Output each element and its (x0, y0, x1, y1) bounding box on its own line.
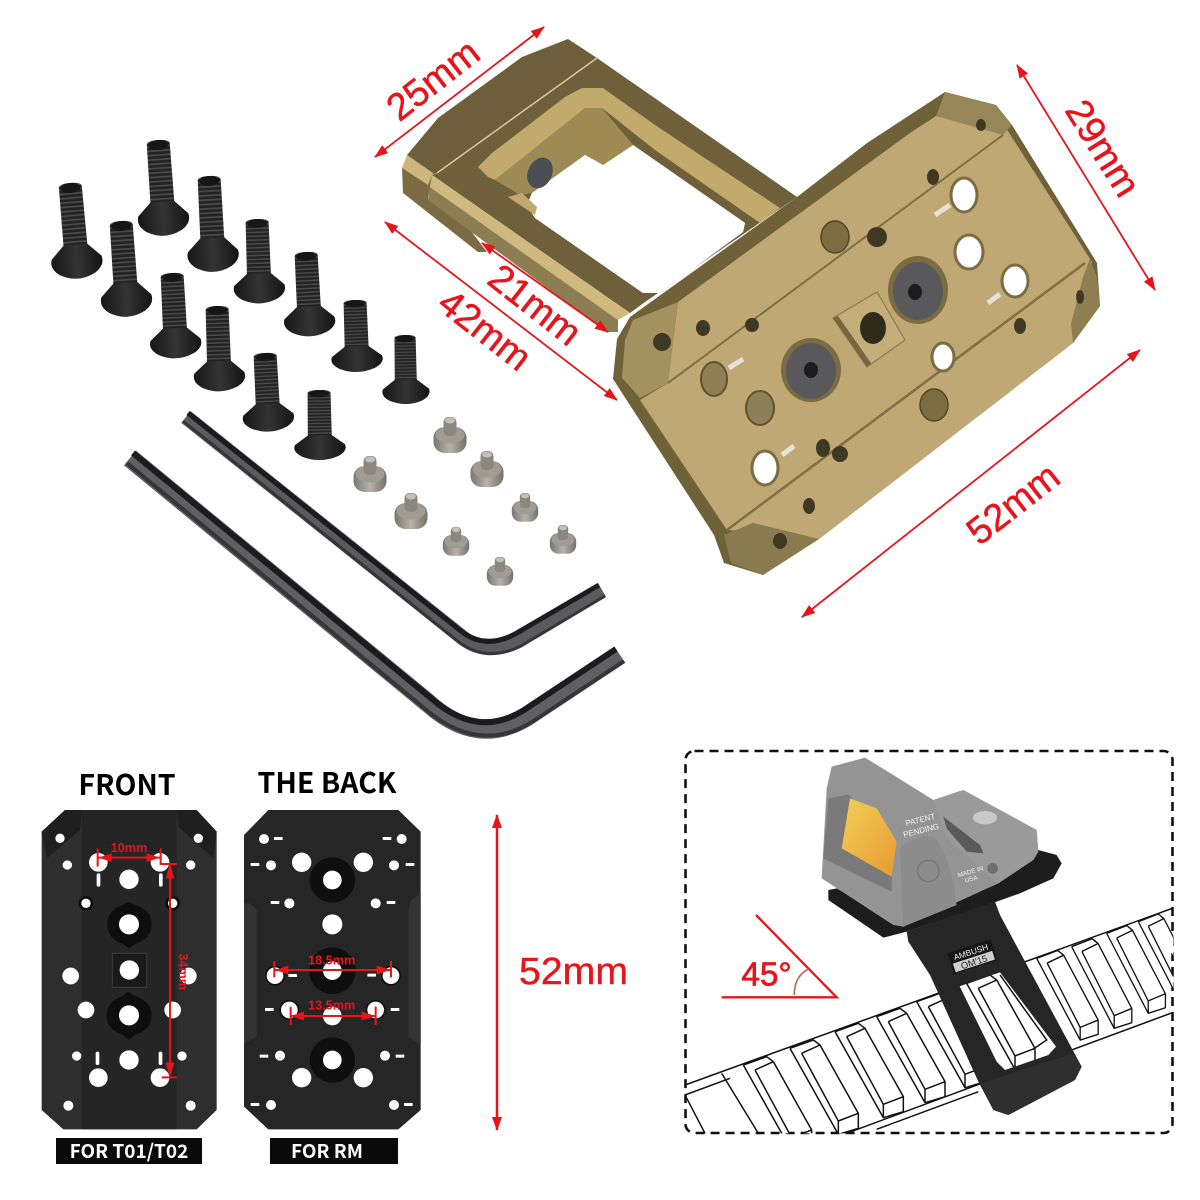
holes: threaded (821, 221, 948, 421)
bracket: long light strip (430, 175, 630, 320)
arm label: AMBUSH OM'15 (947, 939, 997, 974)
arm label: AMBUSH OM'15: AMBUSH (952, 942, 989, 962)
optic text: made in USA: MADE IN (957, 865, 985, 879)
socket screws (781, 256, 948, 402)
bracket: light end strip (402, 155, 433, 185)
bracket: white window (527, 145, 745, 293)
bracket: strip underside (428, 187, 618, 332)
label: plate height 52mm: 52mm (519, 951, 628, 993)
square nut block (833, 292, 905, 367)
tag: FOR RM (270, 1137, 398, 1164)
pins seated in plate (701, 362, 774, 425)
optic lens (842, 798, 897, 877)
holes: small and notches (653, 119, 1084, 549)
rail and mount scene (685, 758, 1196, 1151)
dimension: 10mm and 34mm (98, 841, 190, 1077)
label: 25mm: 25mm (379, 31, 488, 130)
heading: FRONT: FRONT (78, 763, 176, 804)
bracket: gold tab (508, 193, 537, 215)
tag: FOR RM: FOR RM (291, 1137, 363, 1164)
plate: back (244, 810, 421, 1129)
arm label: AMBUSH OM'15: OM'15 (960, 953, 989, 971)
arrow: plate height (496, 815, 498, 1130)
bracket: frame with window (432, 58, 797, 313)
angle diagram: 45 degrees (722, 915, 837, 997)
optic text: patent pending: PATENT (905, 812, 936, 828)
plate: front (42, 810, 217, 1129)
dimension: 18.5mm and 13.5mm (274, 954, 391, 1025)
bracket: side face (402, 168, 487, 252)
label: 21mm: 21mm (480, 256, 589, 355)
heading: THE BACK: THE BACK (258, 761, 397, 802)
dimension: 18.5mm and 13.5mm: 18.5mm (308, 954, 355, 968)
dimension: 10mm and 34mm: 34mm (176, 953, 190, 990)
bracket: stud (568, 120, 633, 165)
dashed frame (686, 751, 1172, 1133)
holes: white through holes (752, 178, 1028, 485)
panel: front and back plates (42, 761, 421, 1164)
hardware: screws (44, 138, 430, 461)
dimension arrows: top product (375, 27, 1155, 617)
facet: top corner (936, 92, 1012, 135)
slit marks (729, 205, 1000, 455)
panel: 45 degree mount on rail (685, 751, 1196, 1151)
dimension: 18.5mm and 13.5mm: 13.5mm (308, 999, 355, 1013)
product: tan mounting plate (613, 92, 1100, 575)
bracket: interior recess (495, 108, 633, 195)
hardware: hex keys (127, 413, 624, 736)
mount arm (907, 902, 1082, 1115)
red dot optic: PENDING (902, 822, 940, 839)
red dot optic (822, 758, 1038, 927)
tag: FOR T01/T02: FOR T01/T02 (70, 1137, 188, 1164)
facet: bottom corner (724, 523, 819, 575)
mount base plate (828, 850, 1062, 938)
label: 52mm: 52mm (959, 455, 1068, 554)
label: 42mm: 42mm (430, 281, 539, 380)
angle diagram: 45 degrees: 45° (741, 956, 792, 993)
bracket: inner light rim (478, 88, 780, 223)
dimension: 10mm and 34mm: 10mm (111, 841, 147, 855)
red dot optic: USA (964, 874, 979, 885)
bracket: top band (407, 39, 597, 174)
label: 29mm: 29mm (1056, 93, 1148, 205)
hardware: small pins (354, 417, 576, 586)
product: tan bracket arm (402, 39, 797, 332)
picatinny rail (685, 908, 1174, 1134)
bracket: grey set screw (522, 153, 558, 193)
facet: right corner (1071, 259, 1100, 343)
facet: left corner (622, 302, 678, 398)
